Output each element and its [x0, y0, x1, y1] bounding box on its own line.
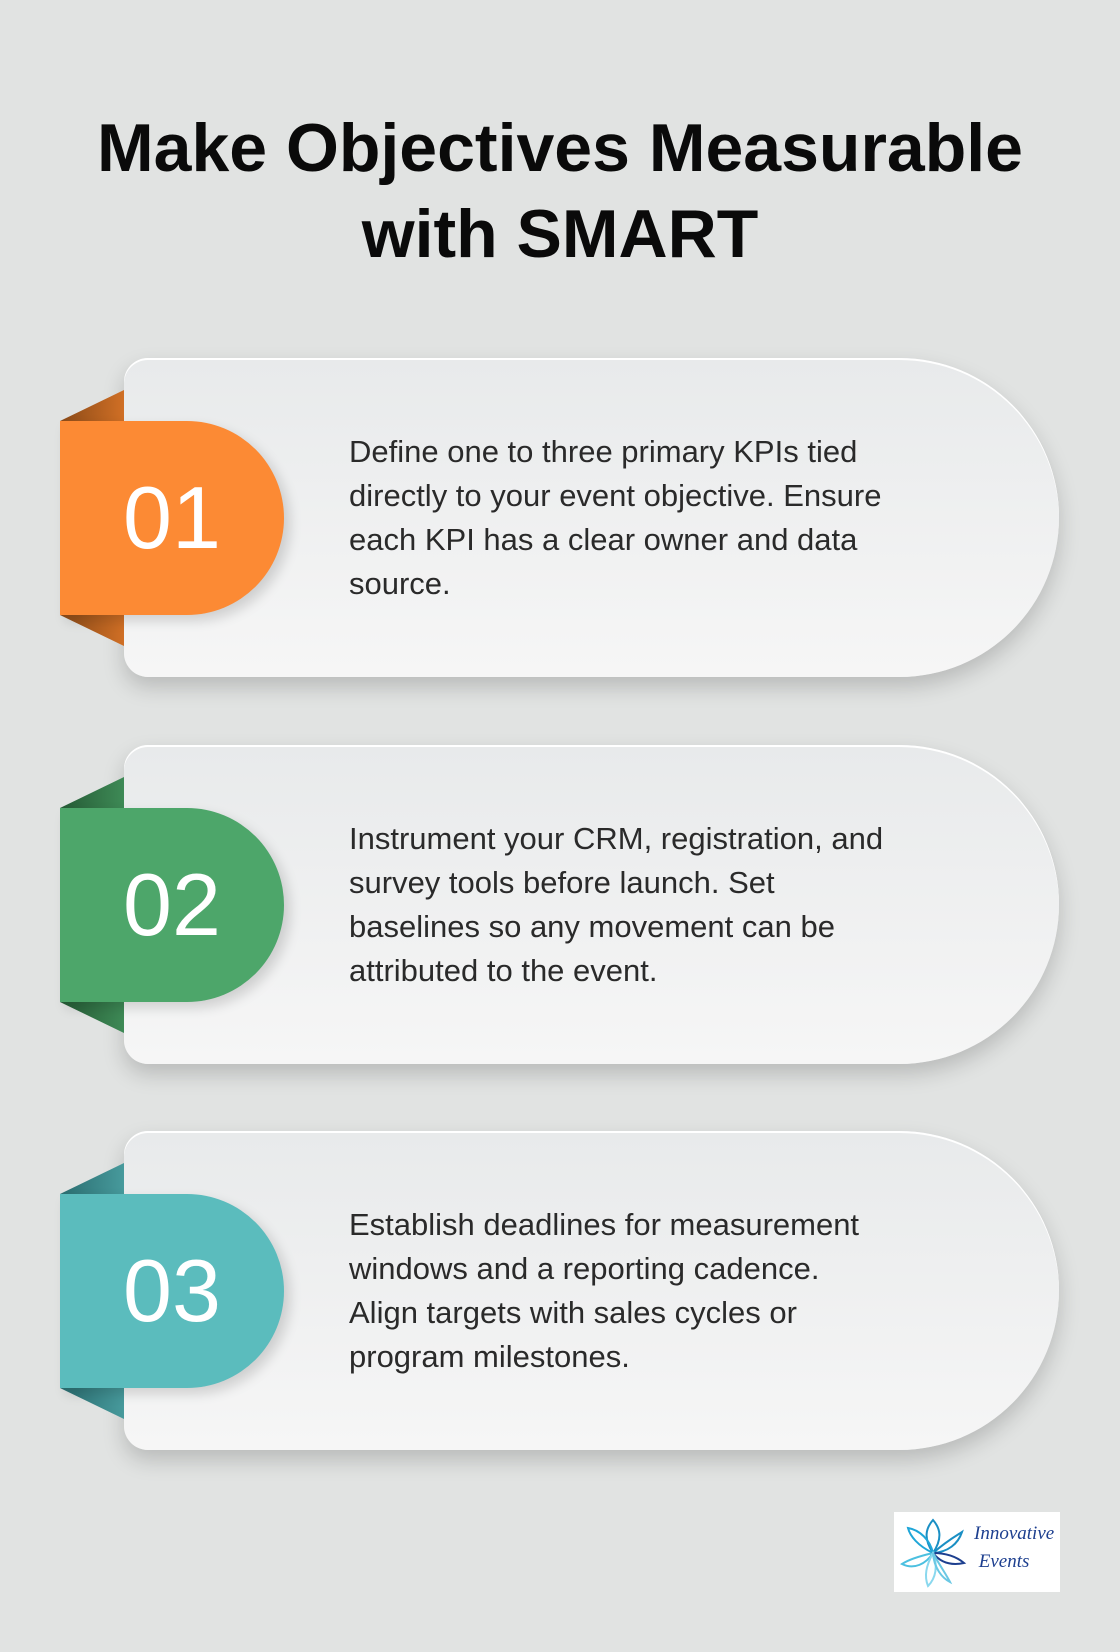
text 2: attributed to the event.	[349, 953, 658, 988]
text 2: baselines so any movement can be	[349, 909, 835, 944]
fold top 1	[60, 390, 124, 421]
fold bottom 3	[60, 1388, 124, 1419]
badge 02	[60, 808, 284, 1002]
title	[97, 110, 1023, 272]
logo text	[974, 1523, 1054, 1572]
text 1: Define one to three primary KPIs tied	[349, 434, 857, 469]
logo text: Events	[979, 1551, 1029, 1572]
fold bottom 2	[60, 1002, 124, 1033]
text 2: survey tools before launch. Set	[349, 865, 775, 900]
text 2	[349, 821, 883, 988]
text 2: Instrument your CRM, registration, and	[349, 821, 883, 856]
text 1: each KPI has a clear owner and data	[349, 522, 857, 557]
badge 01	[60, 421, 284, 615]
title: with SMART	[362, 196, 758, 272]
text 3: program milestones.	[349, 1339, 630, 1374]
step 1	[60, 358, 1067, 696]
card 3	[124, 1131, 1059, 1450]
fold top 2	[60, 777, 124, 808]
step 3	[60, 1131, 1067, 1468]
card 1	[124, 358, 1059, 677]
text 3: Align targets with sales cycles or	[349, 1295, 797, 1330]
badge 01: 01	[123, 468, 221, 567]
badge 02: 02	[123, 855, 221, 954]
text 1: source.	[349, 566, 451, 601]
badge 03	[60, 1194, 284, 1388]
text 3: Establish deadlines for measurement	[349, 1207, 859, 1242]
logo	[894, 1512, 1060, 1592]
icon: flower	[900, 1518, 966, 1588]
text 1: directly to your event objective. Ensure	[349, 478, 881, 513]
text 3	[349, 1207, 859, 1374]
badge 03: 03	[123, 1241, 221, 1340]
step 2	[60, 745, 1067, 1082]
text 3: windows and a reporting cadence.	[349, 1251, 819, 1286]
card 2	[124, 745, 1059, 1064]
title: Make Objectives Measurable	[97, 110, 1023, 186]
fold bottom 1	[60, 615, 124, 646]
text 1	[349, 434, 881, 601]
fold top 3	[60, 1163, 124, 1194]
logo text: Innovative	[974, 1523, 1054, 1544]
